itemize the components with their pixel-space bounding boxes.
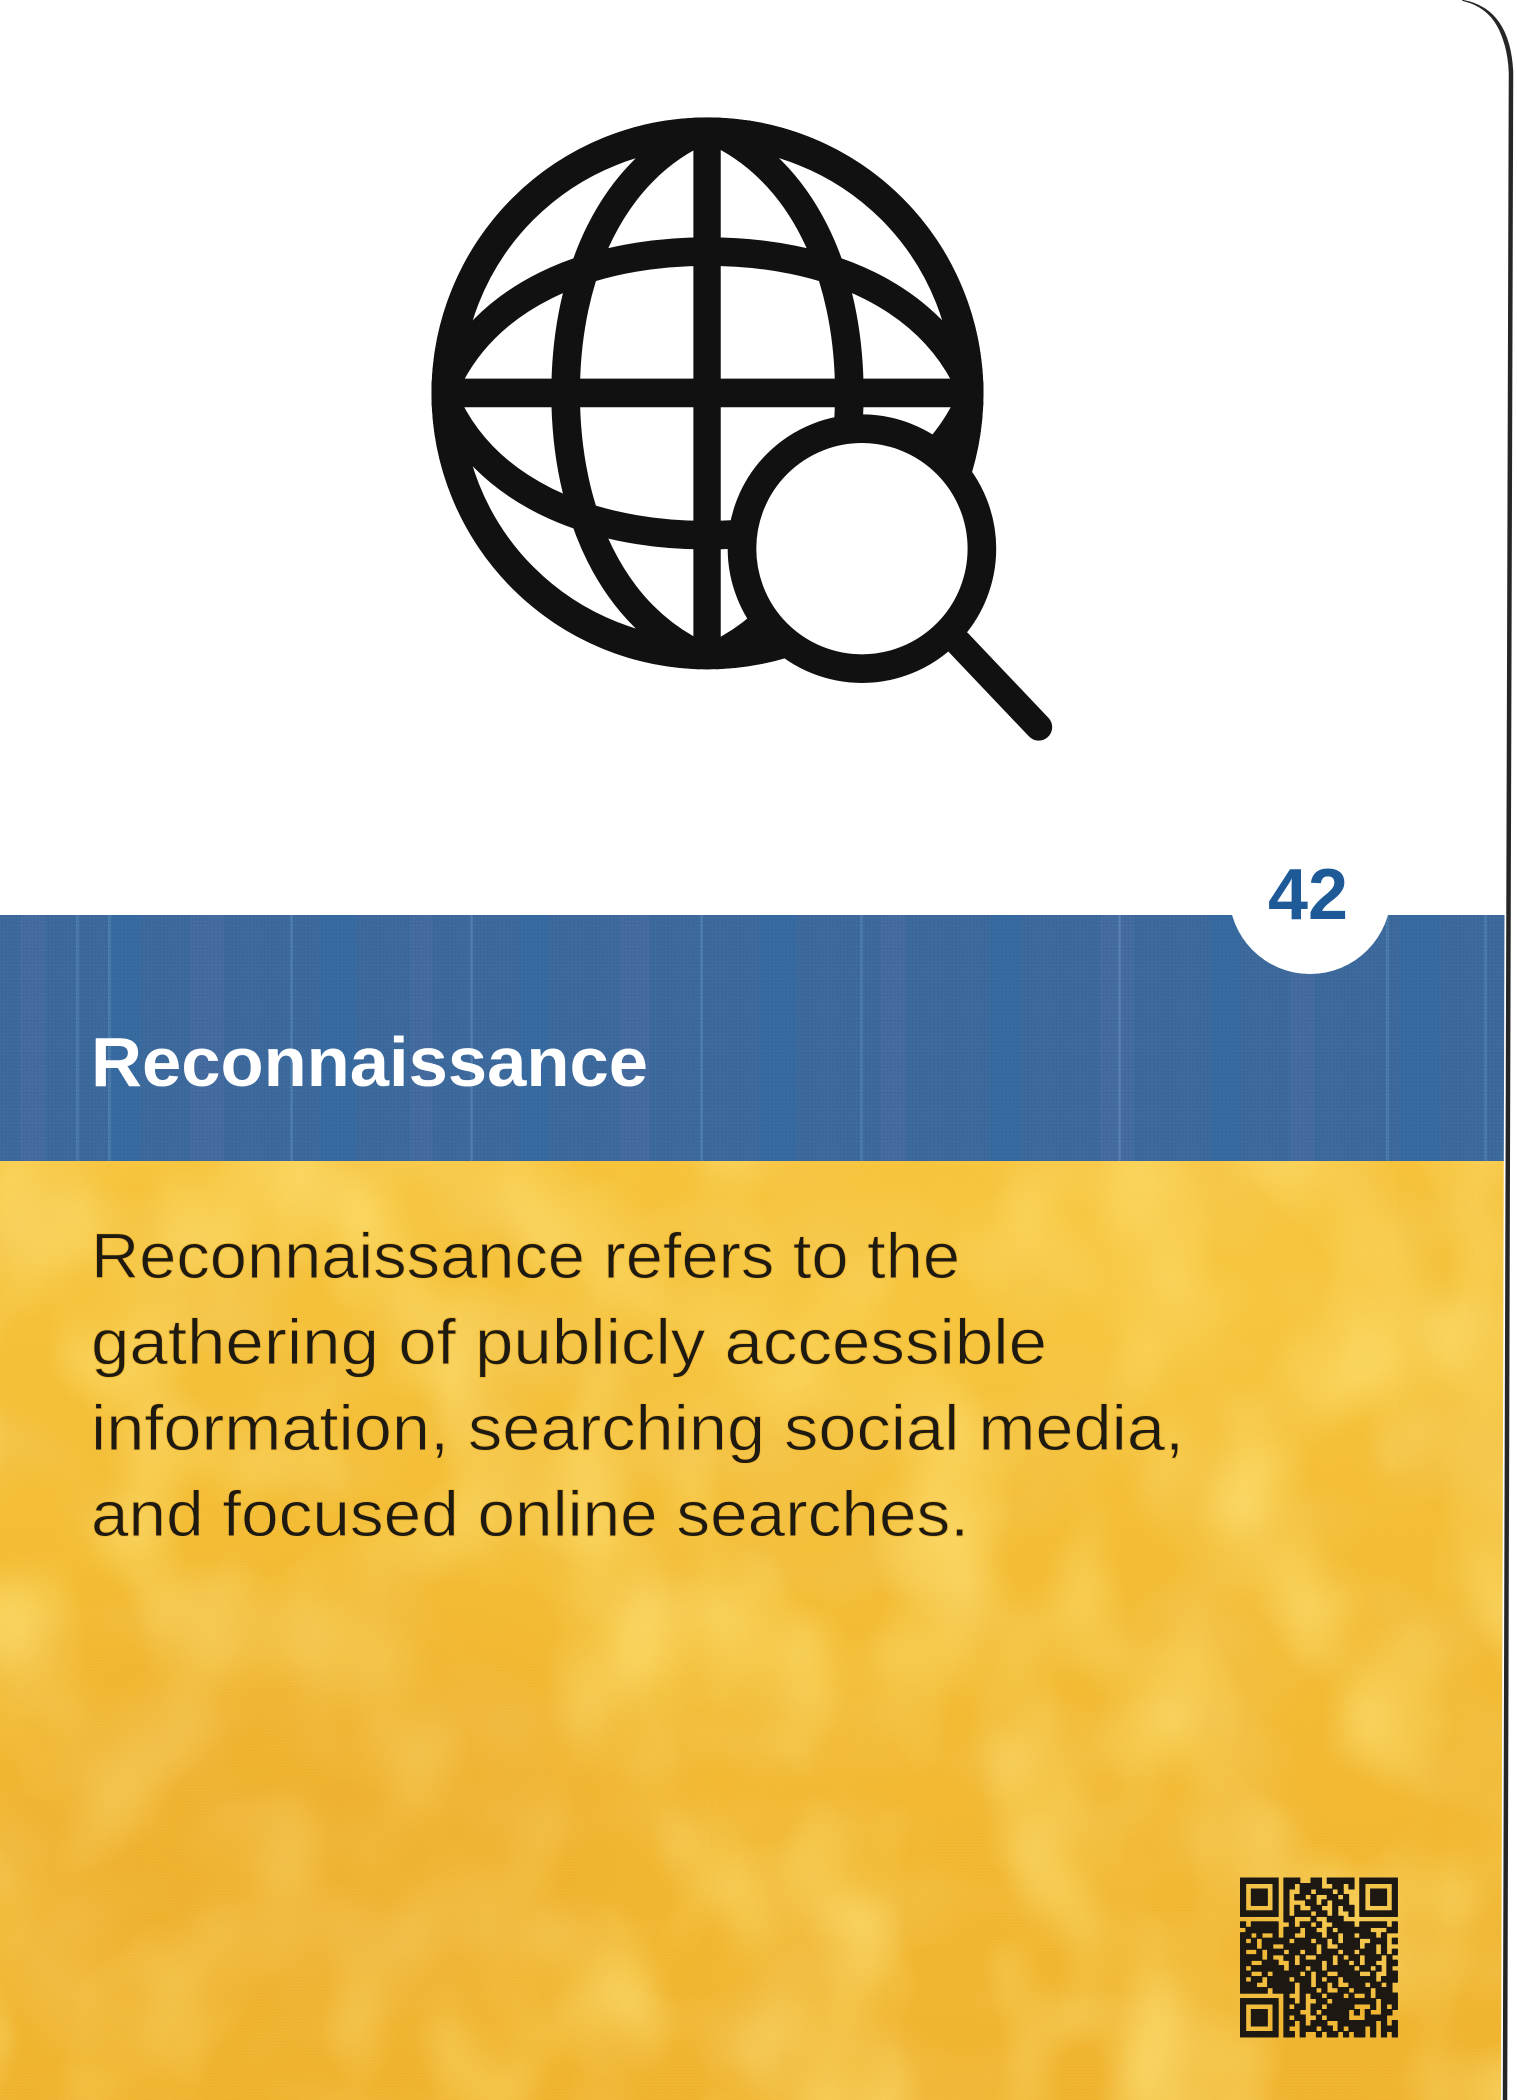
white icon area xyxy=(1462,0,1504,43)
title: Reconnaissance xyxy=(91,1023,648,1101)
panel: blue title band xyxy=(0,915,1517,1161)
panel: yellow description background xyxy=(0,1160,1517,2100)
description text: gathering of publicly accessible xyxy=(91,1306,1047,1378)
number badge xyxy=(1232,868,1388,974)
description text: information, searching social media, xyxy=(91,1392,1184,1464)
description text xyxy=(91,1220,1184,1550)
QR code xyxy=(1240,1881,1398,2034)
number badge: 42 xyxy=(1268,855,1348,935)
icon: globe with magnifying glass xyxy=(441,125,1039,727)
description text: and focused online searches. xyxy=(91,1478,969,1550)
description text: Reconnaissance refers to the xyxy=(91,1220,960,1292)
card right edge xyxy=(1462,2,1511,2100)
